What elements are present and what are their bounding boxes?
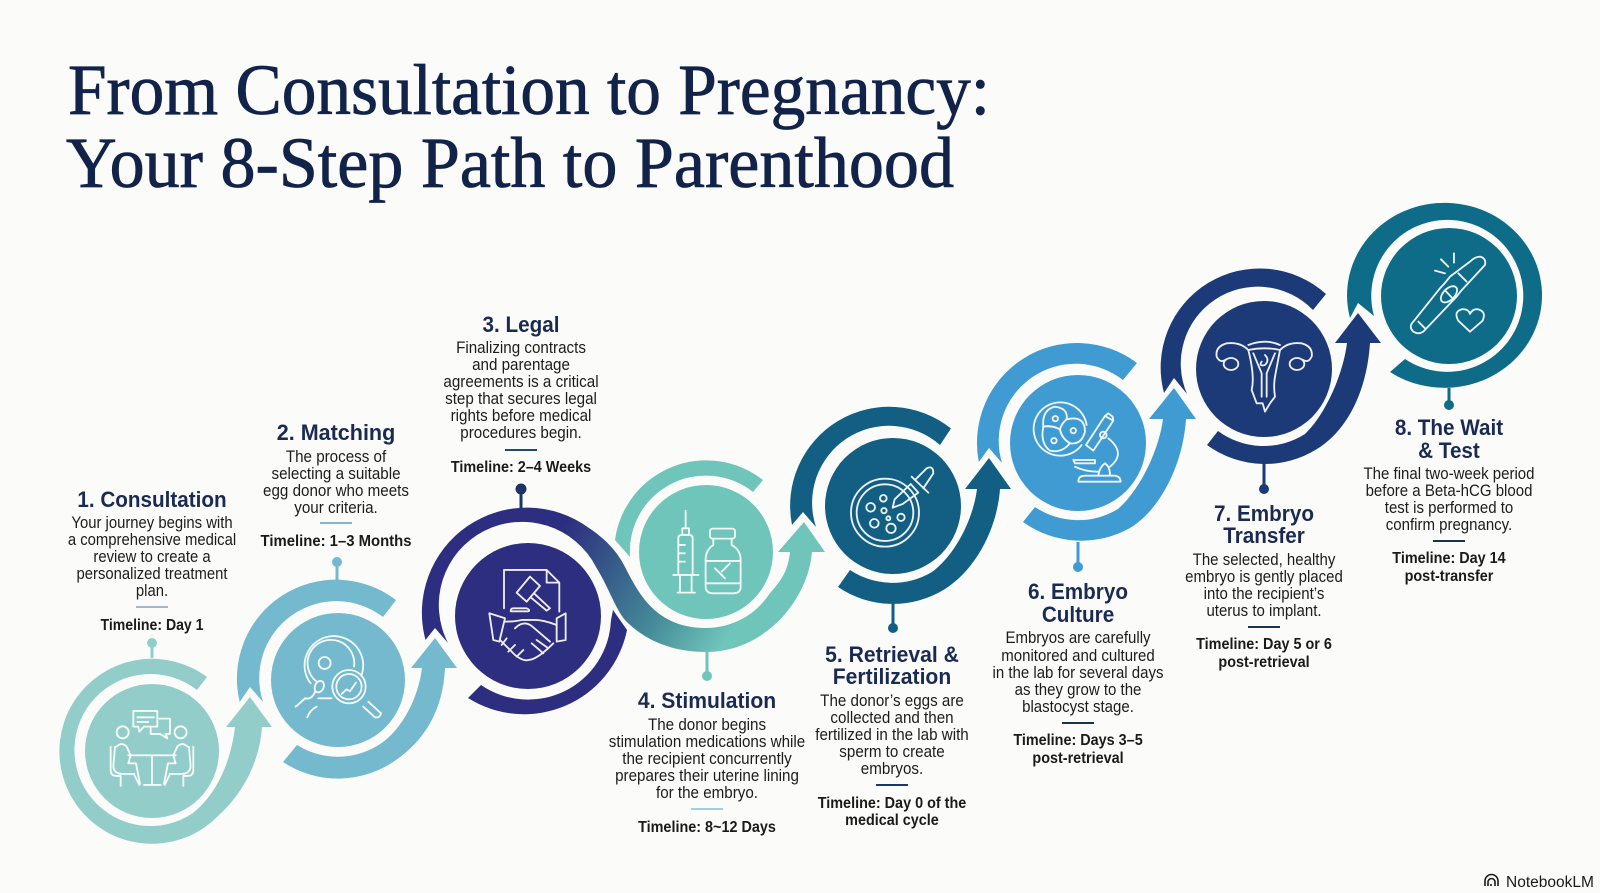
title: [66, 50, 990, 203]
icon: dividing embryo and microscope: [1034, 402, 1121, 482]
text: step 1: 1. Consultation: [77, 487, 227, 512]
pin 2: [336, 562, 338, 580]
text: step 2: 2. Matching: [277, 420, 395, 445]
step 6 graphic: embryo culture: [977, 343, 1196, 572]
text: step 1: Your journey begins with: [71, 514, 233, 532]
pin 6: [1076, 542, 1080, 567]
disc 4: [639, 485, 773, 619]
text: step 8: confirm pregnancy.: [1386, 516, 1512, 534]
icon: egg, sperm and magnifier: [296, 636, 381, 717]
icon: uterus: [1216, 342, 1312, 412]
step 1 graphic: consultation: [59, 638, 272, 844]
text: step 7: [1185, 501, 1343, 671]
text: step 5: collected and then: [830, 709, 954, 727]
disc 6: [1010, 375, 1146, 511]
text: step 6: Culture: [1042, 602, 1114, 627]
lower ring and arrow 2: [283, 638, 457, 779]
text: step 3: and parentage: [472, 356, 570, 374]
text: step 3: 3. Legal: [483, 312, 559, 337]
text: step 7: embryo is gently placed: [1185, 568, 1343, 586]
text: step 6: as they grow to the: [1015, 681, 1142, 699]
text: step 8: test is performed to: [1385, 499, 1513, 517]
text: step 4: [609, 688, 805, 836]
upper ring 6: [977, 343, 1137, 463]
text: step 6: Timeline: Days 3–5: [1013, 731, 1143, 749]
text: step 6: monitored and cultured: [1001, 647, 1155, 665]
step 5 graphic: retrieval and fertilization: [790, 407, 1011, 633]
text: step 6: in the lab for several days: [992, 664, 1164, 682]
text: step 1: Timeline: Day 1: [101, 616, 203, 634]
upper ring 7: [1161, 268, 1326, 394]
S-band from ring 3 to arrow 4: [422, 508, 825, 652]
lower ring 3: [468, 610, 627, 714]
icon: petri dish and dropper: [851, 467, 933, 547]
pin 7: [1262, 463, 1266, 489]
text: step 5: [815, 642, 969, 829]
text: step 1: review to create a: [93, 548, 211, 566]
text: step 3: rights before medical: [451, 407, 591, 425]
text: step 4: The donor begins: [648, 716, 766, 734]
text: step 1: personalized treatment: [77, 565, 228, 583]
disc 5: [825, 438, 961, 574]
text: step 7: uterus to implant.: [1206, 602, 1322, 620]
text: step 1: a comprehensive medical: [68, 531, 236, 549]
text: step 5: The donor’s eggs are: [820, 692, 964, 710]
text: step 3: Finalizing contracts: [456, 339, 586, 357]
text: step 8: Timeline: Day 14: [1392, 549, 1506, 567]
lower ring and arrow 7: [1207, 313, 1381, 464]
pin 4: [706, 652, 708, 676]
text: step 3: Timeline: 2–4 Weeks: [451, 458, 591, 476]
text: step 4: Timeline: 8~12 Days: [638, 818, 776, 836]
text: step 7: Timeline: Day 5 or 6: [1196, 635, 1332, 653]
icon: two people at a table talking: [111, 711, 193, 786]
step 8 graphic: the wait and test: [1347, 203, 1542, 410]
step 7 graphic: embryo transfer: [1161, 268, 1381, 494]
icon: syringe and medication bottle: [673, 511, 741, 593]
text: step 8: 8. The Wait: [1395, 415, 1503, 440]
step 4 graphic: stimulation: [615, 460, 773, 681]
text: step 4: 4. Stimulation: [638, 688, 776, 713]
upper ring 2: [237, 580, 396, 702]
disc 7: [1196, 301, 1332, 437]
text: step 5: Fertilization: [833, 664, 951, 689]
step 3 graphic: legal: [422, 484, 825, 714]
text: step 5: 5. Retrieval &: [825, 642, 959, 667]
pin 1: [150, 643, 154, 658]
text: step 8: post-transfer: [1405, 567, 1493, 585]
text: step 6: post-retrieval: [1032, 749, 1124, 767]
text: step 4: the recipient concurrently: [622, 750, 792, 768]
text: step 8: [1363, 415, 1535, 585]
text: step 3: step that secures legal: [445, 390, 597, 408]
disc 8: [1381, 228, 1517, 364]
lower ring and arrow 6: [1023, 388, 1196, 541]
disc 3: [455, 543, 601, 689]
text: step 5: Timeline: Day 0 of the: [818, 794, 966, 812]
text: step 3: [443, 312, 599, 476]
text: step 2: Timeline: 1–3 Months: [261, 533, 411, 550]
text: step 4: for the embryo.: [656, 784, 758, 802]
lower ring and arrow 5: [838, 458, 1011, 604]
text: step 5: medical cycle: [845, 811, 939, 829]
text: step 8: before a Beta-hCG blood: [1366, 482, 1532, 500]
text: step 5: fertilized in the lab with: [815, 726, 969, 744]
text: step 8: & Test: [1418, 438, 1480, 463]
disc 2: [271, 613, 405, 747]
text: step 6: [992, 579, 1164, 767]
ring and arrow 1: [59, 659, 272, 844]
text: step 2: [261, 420, 411, 550]
ring 8: [1347, 203, 1542, 388]
NotebookLM logo: NotebookLM: [1506, 874, 1594, 891]
text: step 8: The final two-week period: [1363, 465, 1535, 483]
disc 1: [85, 684, 219, 818]
upper ring 4: [615, 460, 763, 557]
text: step 1: [68, 487, 236, 634]
text: step 5: sperm to create: [839, 743, 945, 761]
pin 3: [520, 489, 522, 509]
text: step 7: 7. Embryo: [1214, 501, 1314, 526]
upper ring 5: [790, 407, 951, 527]
title: Your 8-Step Path to Parenthood: [66, 123, 954, 203]
title: From Consultation to Pregnancy:: [68, 50, 990, 130]
icon: pregnancy test and heart: [1411, 253, 1485, 333]
text: step 5: embryos.: [861, 760, 923, 778]
text: step 2: your criteria.: [294, 499, 378, 517]
text: step 2: egg donor who meets: [263, 482, 409, 500]
text: step 4: prepares their uterine lining: [615, 767, 799, 785]
text: step 7: Transfer: [1223, 523, 1305, 548]
text: step 1: plan.: [136, 582, 168, 600]
step 2 graphic: matching: [237, 557, 457, 779]
text: step 6: blastocyst stage.: [1022, 698, 1134, 716]
text: step 2: The process of: [286, 448, 387, 466]
text: step 7: The selected, healthy: [1193, 551, 1335, 569]
text: step 7: post-retrieval: [1218, 653, 1310, 671]
pin 8: [1448, 388, 1450, 405]
text: step 3: agreements is a critical: [443, 373, 599, 391]
pin 5: [892, 603, 894, 628]
text: step 6: 6. Embryo: [1028, 579, 1128, 604]
text: step 2: selecting a suitable: [271, 465, 401, 483]
icon: contract, gavel and handshake: [489, 570, 566, 660]
text: step 7: into the recipient’s: [1204, 585, 1324, 603]
text: step 3: procedures begin.: [460, 424, 582, 442]
text: step 6: Embryos are carefully: [1005, 629, 1151, 647]
text: step 4: stimulation medications while: [609, 733, 805, 751]
